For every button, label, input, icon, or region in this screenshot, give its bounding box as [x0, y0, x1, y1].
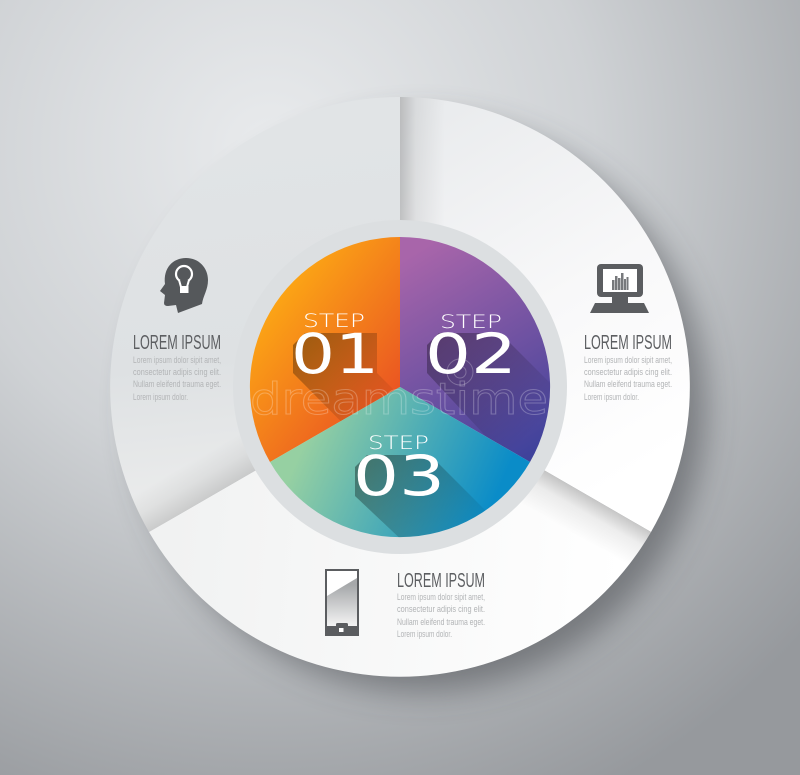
text block: right: LOREM IPSUM: [584, 332, 672, 354]
text block: bottom: [397, 570, 485, 640]
step 3 label: [353, 432, 445, 508]
text block: bottom: Lorem ipsum dolor sipit amet,: [397, 592, 485, 603]
text block: right: Nullam eleifend trauma eget.: [584, 379, 672, 390]
icon detail: equalizer bars: [612, 273, 628, 290]
step 1 label: [291, 310, 379, 386]
inner grey ring: [233, 220, 567, 554]
step 1 label: 01: [291, 322, 379, 386]
outer ring of three segments: [100, 90, 690, 677]
centre pie: [250, 237, 550, 538]
text block: bottom: LOREM IPSUM: [397, 570, 485, 592]
step 2 label: 02: [425, 322, 517, 386]
text block: left: Lorem ipsum dolor sipit amet,: [133, 355, 221, 366]
text block: left: LOREM IPSUM: [133, 332, 221, 354]
text block: bottom: Lorem ipsum dolor.: [397, 629, 452, 640]
text block: right: Lorem ipsum dolor.: [584, 392, 639, 403]
watermark: [250, 359, 548, 425]
segment: right: [400, 90, 690, 532]
text block: left: [133, 332, 221, 403]
icon: head with light bulb: [160, 258, 208, 313]
text block: left: Nullam eleifend trauma eget.: [133, 379, 221, 390]
text block: left: consectetur adipis cing elit.: [133, 367, 221, 378]
step 2 label: STEP: [440, 311, 502, 333]
step 1 label: STEP: [303, 310, 365, 332]
pie slice: step 1 orange: [250, 237, 400, 462]
segment: left: [100, 97, 400, 560]
icon: smartphone: [325, 570, 359, 636]
icon: computer monitor: [590, 264, 649, 313]
text block: right: [584, 332, 672, 403]
pie slice: step 3 teal: [270, 387, 530, 538]
text block: right: Lorem ipsum dolor sipit amet,: [584, 355, 672, 366]
text block: bottom: Nullam eleifend trauma eget.: [397, 617, 485, 628]
step 3 label: 03: [353, 444, 445, 508]
step 2 label: [425, 311, 517, 386]
text block: right: consectetur adipis cing elit.: [584, 367, 672, 378]
pie slice: step 2 purple: [400, 237, 550, 462]
watermark: dreamstime: [250, 374, 548, 425]
text block: left: Lorem ipsum dolor.: [133, 392, 188, 403]
step 3 label: STEP: [368, 432, 429, 454]
disc drop shadow: [134, 119, 706, 691]
text block: bottom: consectetur adipis cing elit.: [397, 604, 485, 615]
segment: bottom: [149, 470, 651, 677]
